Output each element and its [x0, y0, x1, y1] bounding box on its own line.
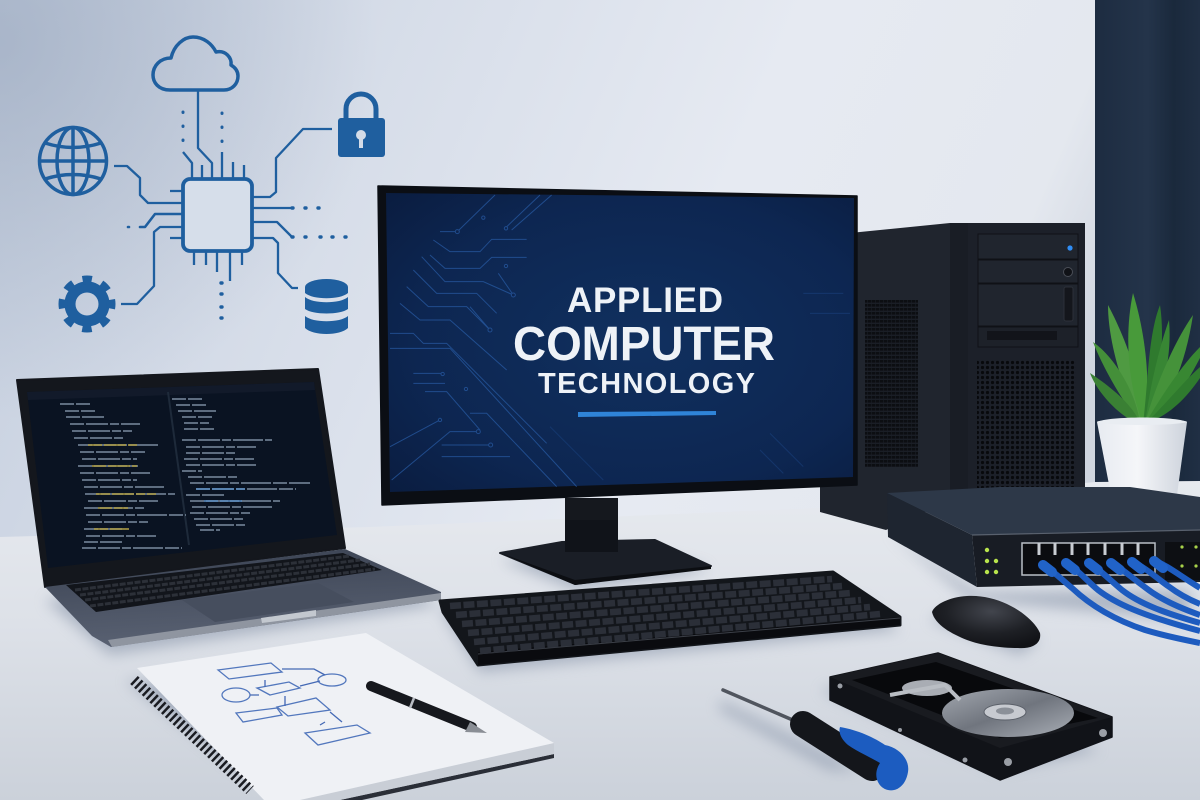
icon: globe [40, 127, 183, 227]
LED indicators [985, 548, 998, 574]
blue ethernet cables [1043, 561, 1200, 643]
circuit traces [390, 195, 850, 487]
icon network diagram [40, 37, 385, 334]
background wall [0, 0, 1200, 560]
laptop [17, 369, 441, 647]
plant pot [1097, 419, 1187, 500]
icon: padlock [252, 94, 385, 197]
monitor title: COMPUTER [513, 318, 775, 371]
dark curtain [1095, 0, 1200, 484]
monitor [378, 186, 857, 505]
ethernet ports [1022, 543, 1155, 575]
computer tower [820, 223, 1085, 530]
monitor title: APPLIED [567, 281, 723, 320]
laptop screen [27, 382, 337, 568]
mouse [932, 596, 1040, 648]
external keyboard [440, 572, 900, 665]
title underline [578, 411, 716, 417]
network switch [887, 487, 1200, 643]
notebook spiral binding [134, 680, 250, 790]
notebook [134, 633, 554, 800]
central chip icon [170, 152, 252, 281]
plant [1090, 293, 1200, 500]
trackpad [182, 583, 354, 622]
code lines [60, 399, 310, 548]
laptop base [45, 549, 441, 647]
monitor title: TECHNOLOGY [538, 368, 755, 400]
icon: cloud [153, 37, 238, 178]
monitor title [513, 281, 775, 400]
hard disk drive [830, 653, 1112, 780]
flowchart sketch [218, 663, 370, 745]
monitor stand [500, 498, 711, 585]
monitor screen [386, 193, 854, 492]
desk surface [0, 481, 1200, 800]
pen [371, 686, 487, 733]
desk shadows [45, 530, 1190, 770]
icon: gear [63, 227, 183, 328]
laptop keyboard [66, 553, 382, 612]
screwdriver [723, 690, 908, 790]
icon: database [221, 208, 348, 334]
actuator arm [890, 680, 960, 700]
